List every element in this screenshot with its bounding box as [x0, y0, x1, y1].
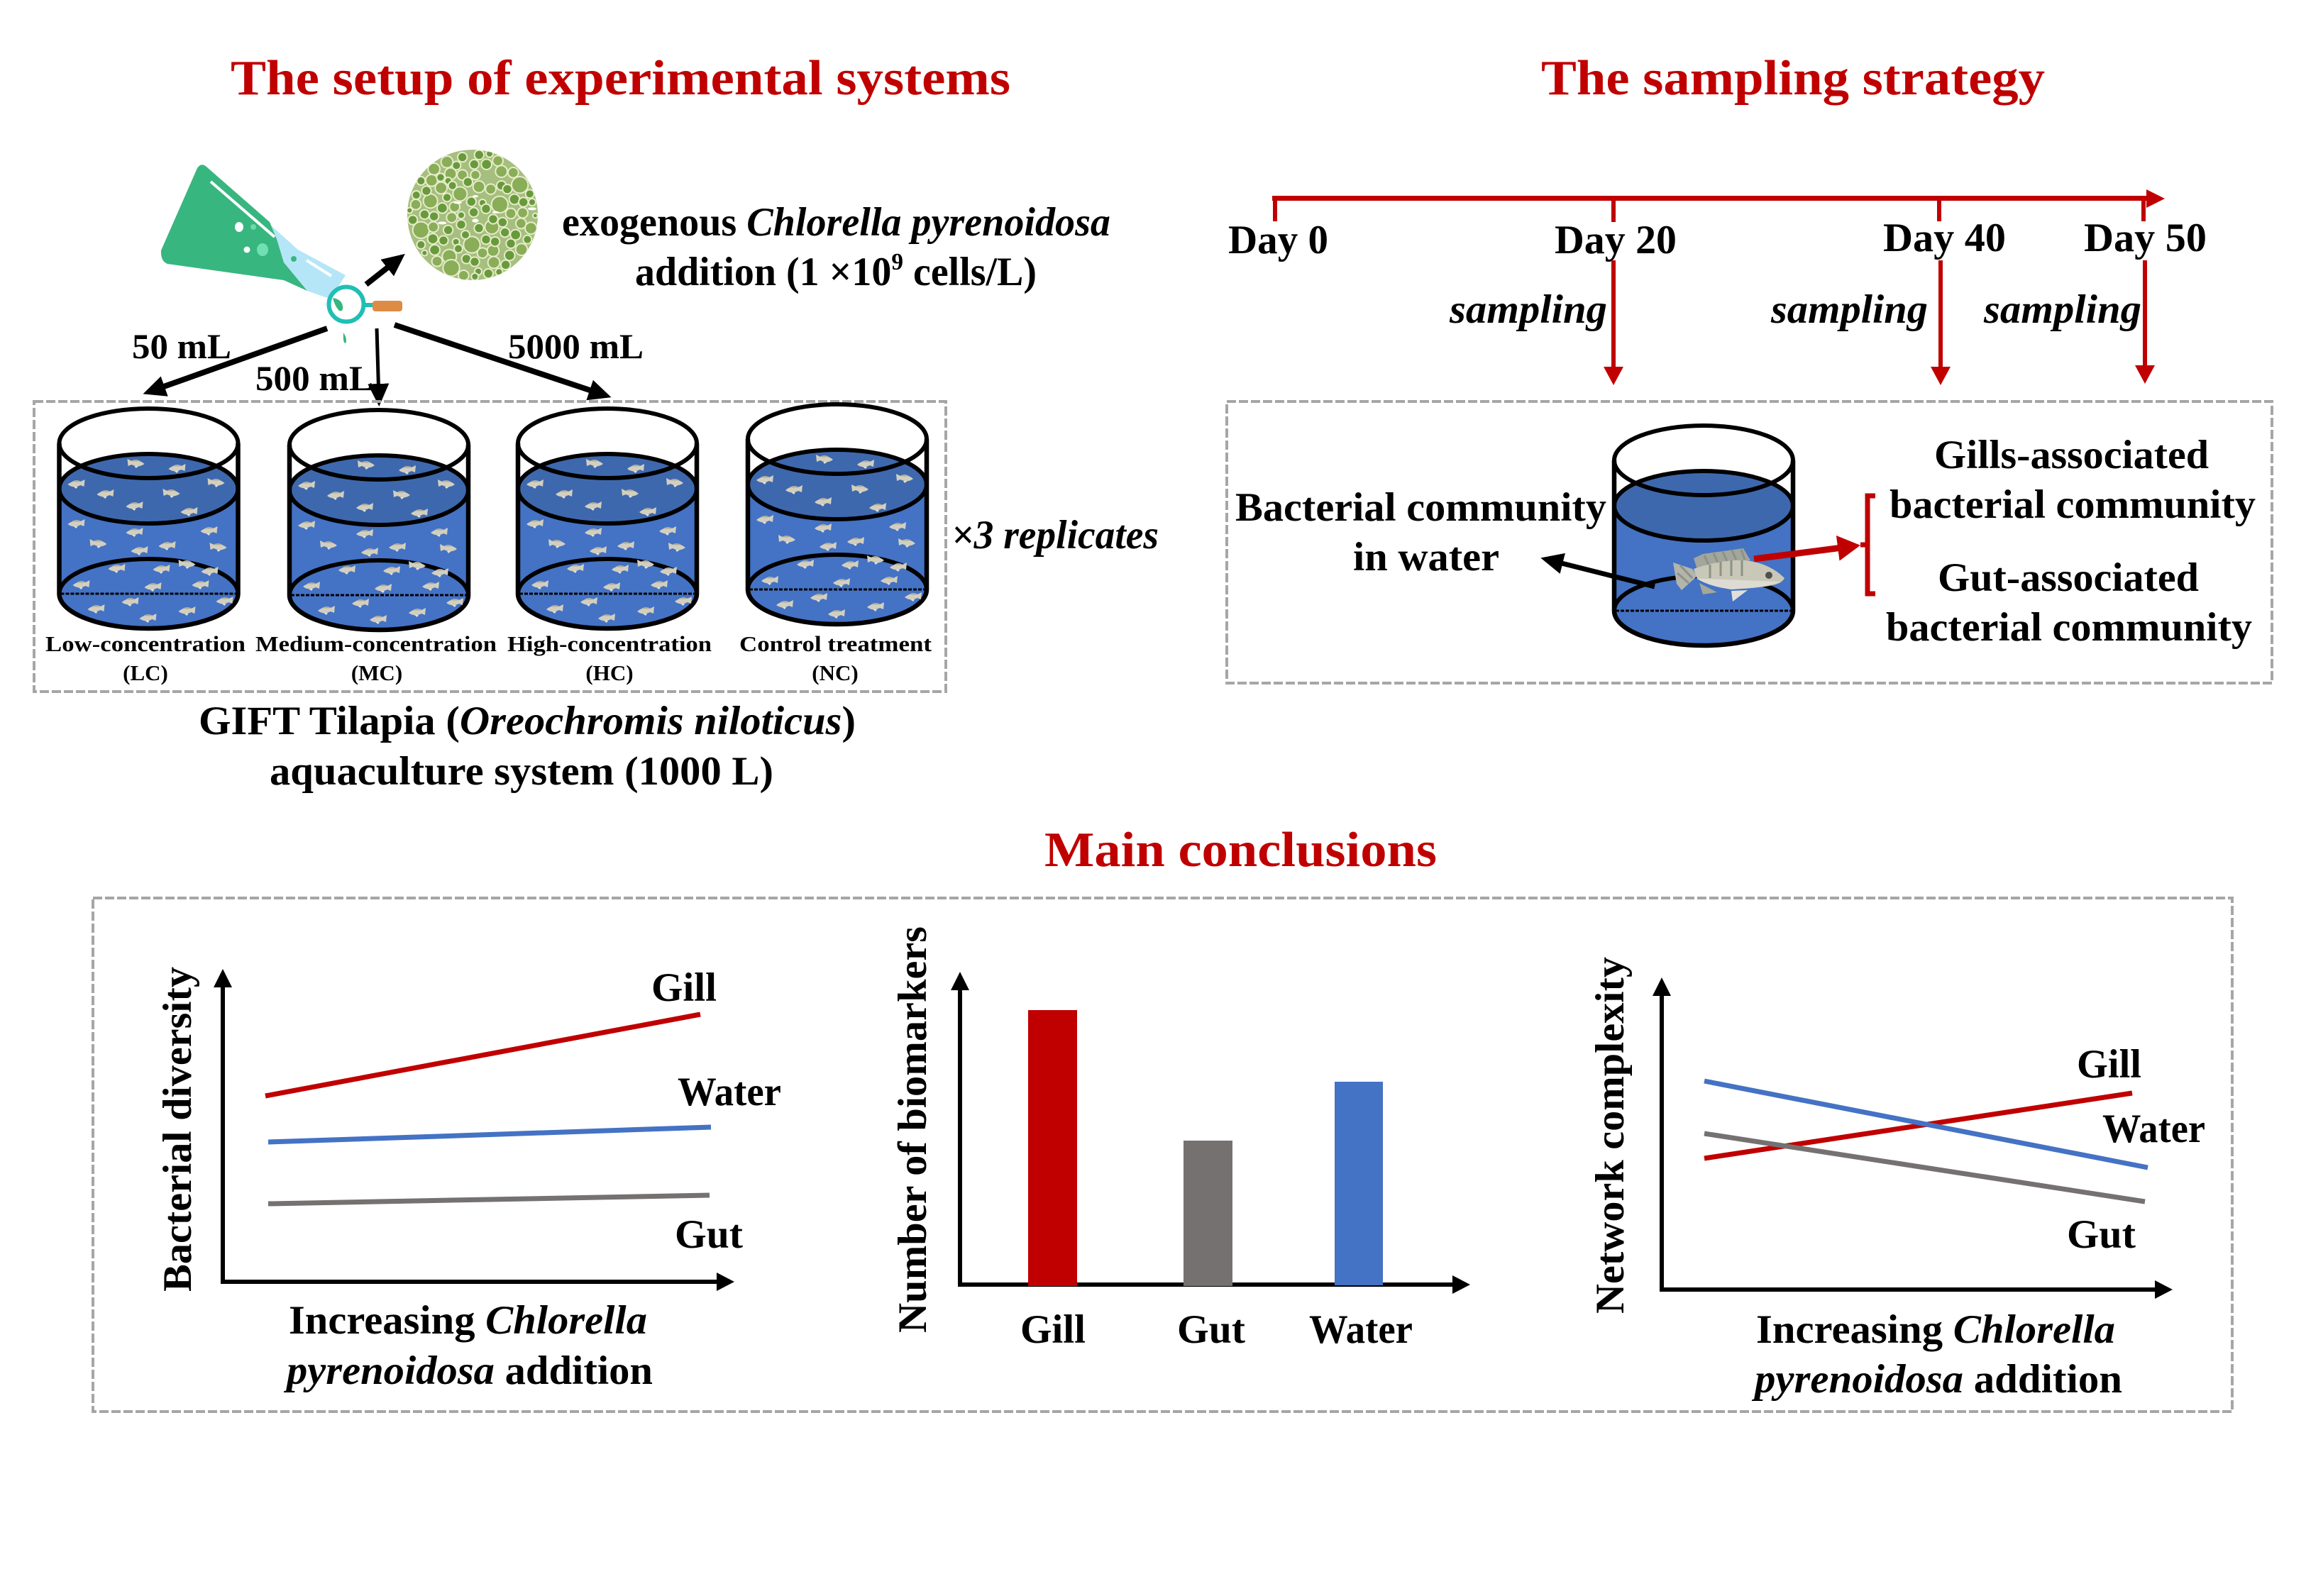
- title: main conclusions: Main conclusions: [1044, 823, 1437, 877]
- label: sampling day 50: sampling: [1983, 287, 2141, 332]
- text: gut-associated community: bacterial community: [1886, 605, 2252, 650]
- label: day 40: Day 40: [1883, 216, 2006, 260]
- arrow: sampling at day 20: [1604, 260, 1623, 385]
- label: low concentration: [45, 631, 246, 685]
- label: day 0: Day 0: [1228, 218, 1328, 262]
- tank: sampling tank: [1614, 426, 1793, 645]
- label: low concentration: (LC): [123, 660, 168, 685]
- chart: number of biomarkers: Gut: [1177, 1307, 1245, 1352]
- chart: network complexity: Gill: [2077, 1042, 2141, 1087]
- label: low concentration: Low-concentration: [45, 631, 246, 656]
- chart: network complexity: [1588, 957, 2205, 1402]
- chart: bacterial diversity: Bacterial diversity: [155, 967, 200, 1292]
- text: gills-associated community: bacterial community: [1890, 482, 2256, 527]
- chart: bacterial diversity: Gut: [675, 1212, 743, 1257]
- label: day 50: Day 50: [2084, 216, 2207, 260]
- text: exogenous chlorella addition: cells/L): [903, 250, 1037, 294]
- text: gut-associated community: [1886, 555, 2252, 650]
- chart: number of biomarkers: [890, 926, 1470, 1352]
- label: sampling day 40: sampling: [1770, 287, 1928, 332]
- chart: number of biomarkers: Number of biomarkers: [890, 926, 935, 1333]
- tank: control treatment: [748, 404, 927, 624]
- arrow: 5000 mL dose: [395, 325, 605, 395]
- arrow: to water community: [1548, 560, 1655, 587]
- text: exogenous chlorella addition: [562, 200, 1110, 294]
- text: exogenous chlorella addition: exogenous Chlorella pyrenoidosa: [562, 200, 1110, 245]
- arrow: 500 mL dose: [377, 328, 379, 399]
- chart: network complexity: pyrenoidosa addition: [1751, 1357, 2122, 1402]
- chart: bacterial diversity: Gill: [651, 965, 717, 1010]
- label: control treatment: (NC): [812, 660, 859, 685]
- title: sampling strategy: The sampling strategy: [1541, 51, 2045, 106]
- label: medium concentration: (MC): [351, 660, 402, 685]
- text: aquaculture system caption: GIFT Tilapia (Oreochromis niloticus ): [199, 699, 856, 743]
- text: aquaculture system caption: aquaculture system (1000 L): [270, 749, 773, 794]
- timeline: [1272, 189, 2165, 222]
- bracket: [1860, 496, 1875, 594]
- label: replicates: ×3 replicates: [951, 513, 1159, 558]
- tank: medium concentration: [289, 410, 468, 630]
- icon: chlorella microscopy circle: [404, 146, 541, 284]
- label: 50 mL: 50 mL: [132, 326, 231, 366]
- label: high concentration: (HC): [585, 660, 634, 685]
- label: high concentration: High-concentration: [507, 631, 712, 656]
- panel: main conclusions: [93, 898, 2232, 1412]
- label: day 20: Day 20: [1555, 218, 1677, 262]
- text: bacterial community in water: [1235, 485, 1606, 580]
- chart: network complexity: Gut: [2067, 1212, 2136, 1257]
- arrow: sampling at day 50: [2135, 260, 2155, 384]
- arrow: to fish-associated communities: [1754, 546, 1853, 559]
- chart: bacterial diversity: Water: [678, 1070, 781, 1114]
- text: gills-associated community: [1890, 433, 2256, 527]
- label: control treatment: [739, 631, 932, 685]
- text: exogenous chlorella addition: 9: [891, 249, 903, 275]
- chart: network complexity: Water: [2102, 1107, 2205, 1151]
- chart: bacterial diversity: Increasing Chlorella: [289, 1298, 647, 1343]
- tank: high concentration: [518, 409, 697, 628]
- arrow: 50 mL dose: [150, 328, 327, 392]
- arrow: sampling at day 40: [1931, 260, 1951, 385]
- panel: aquaculture tanks: [34, 401, 946, 692]
- label: sampling day 20: sampling: [1449, 287, 1607, 332]
- chart: network complexity: Network complexity: [1588, 957, 1633, 1314]
- title: setup of experimental systems: The setup of experimental systems: [231, 51, 1010, 106]
- chart: bacterial diversity: pyrenoidosa addition: [283, 1348, 653, 1393]
- chart: number of biomarkers: Gill: [1020, 1307, 1086, 1352]
- label: 500 mL: 500 mL: [255, 358, 373, 398]
- chart: network complexity: Increasing Chlorella: [1756, 1307, 2115, 1352]
- label: medium concentration: Medium-concentration: [255, 631, 497, 656]
- panel: sampling targets: [1227, 401, 2272, 683]
- icon: pouring flask with magnifier: [161, 165, 402, 343]
- label: high concentration: [507, 631, 712, 685]
- text: bacterial community in water: Bacterial community: [1235, 485, 1606, 530]
- tank: low concentration: [60, 409, 238, 628]
- text: gills-associated community: Gills-associated: [1934, 433, 2209, 477]
- icon: tilapia fish: [1673, 548, 1784, 602]
- text: bacterial community in water: in water: [1353, 535, 1499, 580]
- text: gut-associated community: Gut-associated: [1938, 555, 2199, 600]
- label: 5000 mL: 5000 mL: [508, 326, 644, 366]
- label: control treatment: Control treatment: [739, 631, 932, 656]
- text: exogenous chlorella addition: addition (1 ×10: [635, 250, 896, 294]
- arrow: flask to chlorella: [366, 258, 399, 284]
- chart: number of biomarkers: Water: [1309, 1307, 1413, 1352]
- text: aquaculture system caption: [199, 699, 856, 794]
- label: medium concentration: [255, 631, 497, 685]
- chart: bacterial diversity: [155, 965, 781, 1393]
